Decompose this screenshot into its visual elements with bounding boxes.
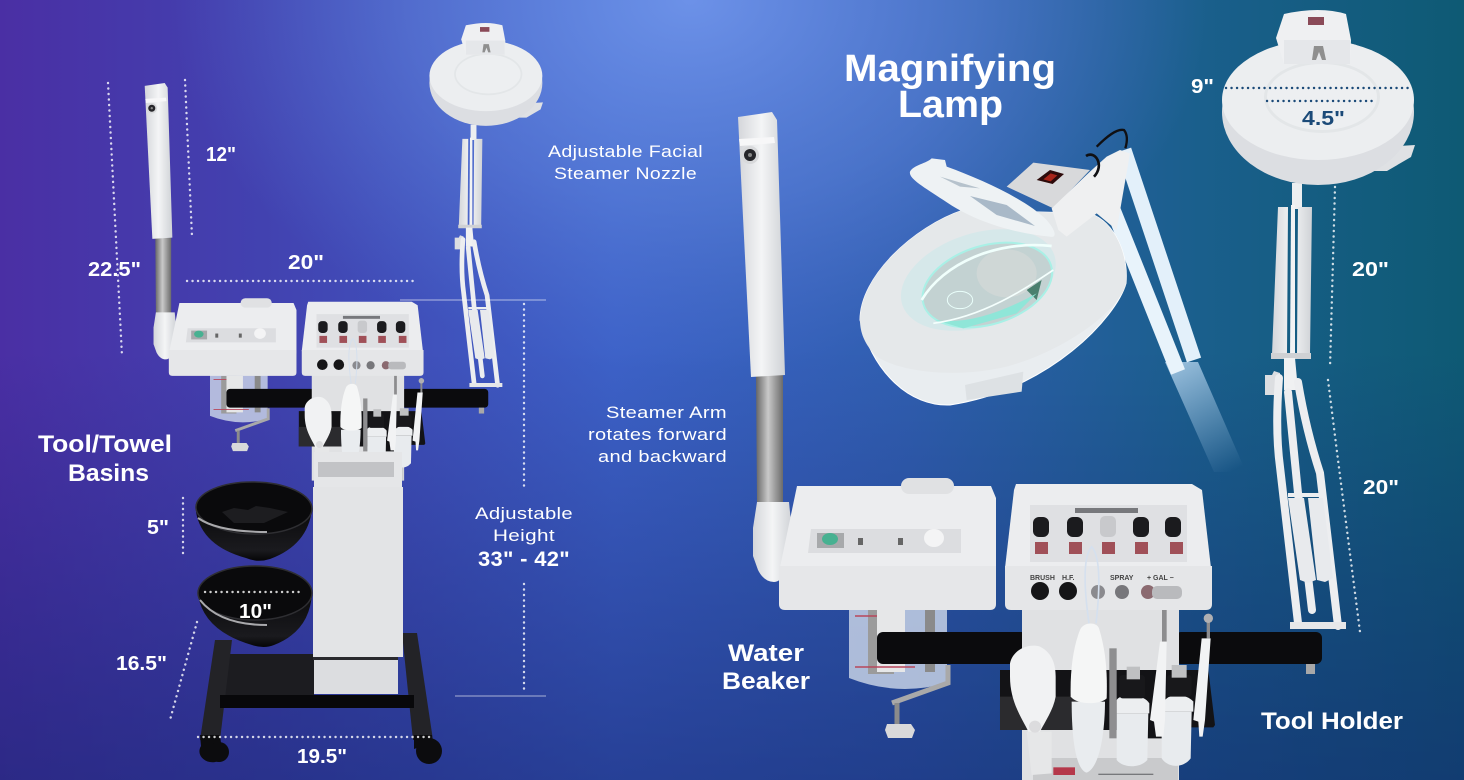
magnifier lens	[912, 228, 1063, 342]
dimension lines	[108, 80, 1408, 737]
labels on the control panel of large machine: BRUSH	[1030, 575, 1055, 582]
right bottle	[1162, 712, 1192, 766]
left measurement labels: 10"	[239, 601, 272, 623]
text: adjustable height: Height	[493, 526, 555, 545]
metal rod	[1109, 648, 1117, 738]
text: adjustable height: Adjustable	[475, 504, 573, 523]
left measurement labels: 12"	[206, 144, 236, 166]
lower basin	[198, 566, 312, 647]
control unit	[1005, 484, 1212, 610]
heading: water beaker	[722, 640, 810, 695]
left measurement labels: 22.5"	[88, 259, 141, 281]
ring top surface	[860, 210, 1126, 373]
inner rim	[888, 211, 1069, 349]
text: adjustable height: 33" - 42"	[478, 548, 570, 571]
wands	[1162, 610, 1167, 642]
steamer unit	[779, 478, 996, 610]
glass electrode stem	[1085, 547, 1099, 623]
left measurement labels: 16.5"	[116, 653, 167, 675]
text: adjustable facial steamer nozzle: Steamer Nozzle	[554, 164, 697, 183]
heading: water beaker: Water	[728, 640, 804, 667]
black tool holder arm	[877, 632, 1322, 674]
lid	[910, 158, 1055, 237]
labels on the control panel of large machine: H.F.	[1062, 575, 1074, 582]
heading: magnifying lamp: Lamp	[898, 84, 1003, 126]
labels on the control panel of large machine: SPRAY	[1110, 575, 1134, 582]
water beaker	[849, 608, 948, 738]
scissor arm to lamp	[1265, 183, 1346, 629]
lamp arm	[1098, 150, 1246, 472]
vacuum tube	[1072, 702, 1105, 773]
right measurement labels: 20"	[1352, 259, 1389, 281]
ring silhouette and side wall	[860, 210, 1126, 405]
right measurement labels: 9"	[1191, 76, 1214, 98]
machine: small left view (same unit at reduced scale)	[145, 23, 543, 481]
tray and tools	[1000, 547, 1215, 775]
magnifying lamp head, front view	[1222, 10, 1415, 185]
text: adjustable facial steamer nozzle: Adjustable Facial	[548, 142, 703, 161]
left bottle	[1117, 713, 1148, 766]
heading: tool/towel basins	[38, 431, 172, 487]
lower column	[313, 452, 403, 694]
labels on the control panel of large machine: + GAL −	[1147, 575, 1174, 582]
tray	[1000, 670, 1215, 738]
lamp switch	[1037, 170, 1064, 184]
cable	[1097, 130, 1127, 148]
left measurement labels: 19.5"	[297, 746, 347, 768]
labels on the control panel of large machine	[1030, 575, 1174, 582]
heading: water beaker: Beaker	[722, 668, 810, 695]
base frame	[199, 633, 442, 764]
lower column, base and basins of left machine	[196, 452, 442, 764]
text: adjustable height	[475, 504, 573, 571]
machine: large right view	[738, 10, 1415, 780]
magnifying lamp, centre feature	[860, 130, 1246, 472]
right measurement labels: 20"	[1363, 477, 1399, 499]
heading: tool/towel basins: Tool/Towel	[38, 431, 172, 458]
spray bottle	[1027, 732, 1052, 775]
upper column	[1022, 608, 1179, 780]
upper basin	[196, 481, 312, 561]
right measurement labels: 4.5"	[1302, 108, 1345, 130]
right measurement labels	[1191, 76, 1399, 499]
heading: tool holder: Tool Holder	[1261, 708, 1403, 735]
text: adjustable facial steamer nozzle	[548, 142, 703, 183]
heading: magnifying lamp	[844, 48, 1056, 126]
text: steamer arm rotates: Steamer Arm	[606, 403, 727, 422]
heading: tool/towel basins: Basins	[68, 460, 149, 487]
vent	[965, 372, 1023, 400]
text: steamer arm rotates: rotates forward	[588, 425, 727, 444]
text: steamer arm rotates: and backward	[598, 447, 727, 466]
switch	[1053, 767, 1075, 775]
left measurement labels: 5"	[147, 517, 169, 539]
left measurement labels: 20"	[288, 252, 324, 274]
housing	[1007, 163, 1090, 208]
left measurement labels	[88, 144, 347, 768]
steamer arm	[738, 112, 792, 582]
heading: magnifying lamp: Magnifying	[844, 48, 1056, 90]
text: steamer arm rotates	[588, 403, 727, 466]
